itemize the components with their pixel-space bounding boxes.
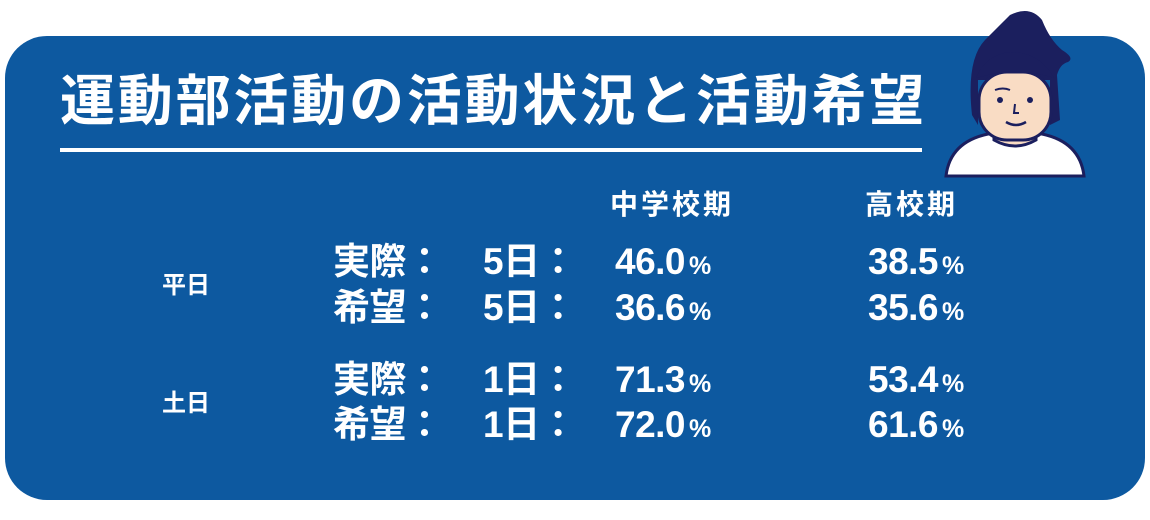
row: 平日 希望: 希望： xyxy=(333,287,442,328)
value: 61.6% xyxy=(868,404,964,445)
title underline xyxy=(60,148,922,152)
value: 53.4% xyxy=(868,359,964,400)
days: 1日： xyxy=(483,359,576,400)
days: 5日： xyxy=(483,287,576,328)
value: 38.5% xyxy=(868,241,964,282)
row label: 平日: 平日 xyxy=(162,272,210,299)
days: 1日： xyxy=(483,404,576,445)
column header: 中学校期: 中学校期 xyxy=(610,189,734,220)
column header: 高校期: 高校期 xyxy=(865,189,958,220)
title: 運動部活動の活動状況と活動希望 xyxy=(60,70,927,132)
row: 土日 希望: 希望： xyxy=(333,404,442,445)
value: 71.3% xyxy=(615,359,711,400)
icon: avatar xyxy=(944,11,1086,178)
value: 36.6% xyxy=(615,287,711,328)
value: 72.0% xyxy=(615,404,711,445)
row label: 土日: 土日 xyxy=(162,390,210,417)
row: 平日 実際: 実際： xyxy=(333,241,442,282)
days: 5日： xyxy=(483,241,576,282)
value: 46.0% xyxy=(615,241,711,282)
row: 土日 実際: 実際： xyxy=(333,359,442,400)
value: 35.6% xyxy=(868,287,964,328)
